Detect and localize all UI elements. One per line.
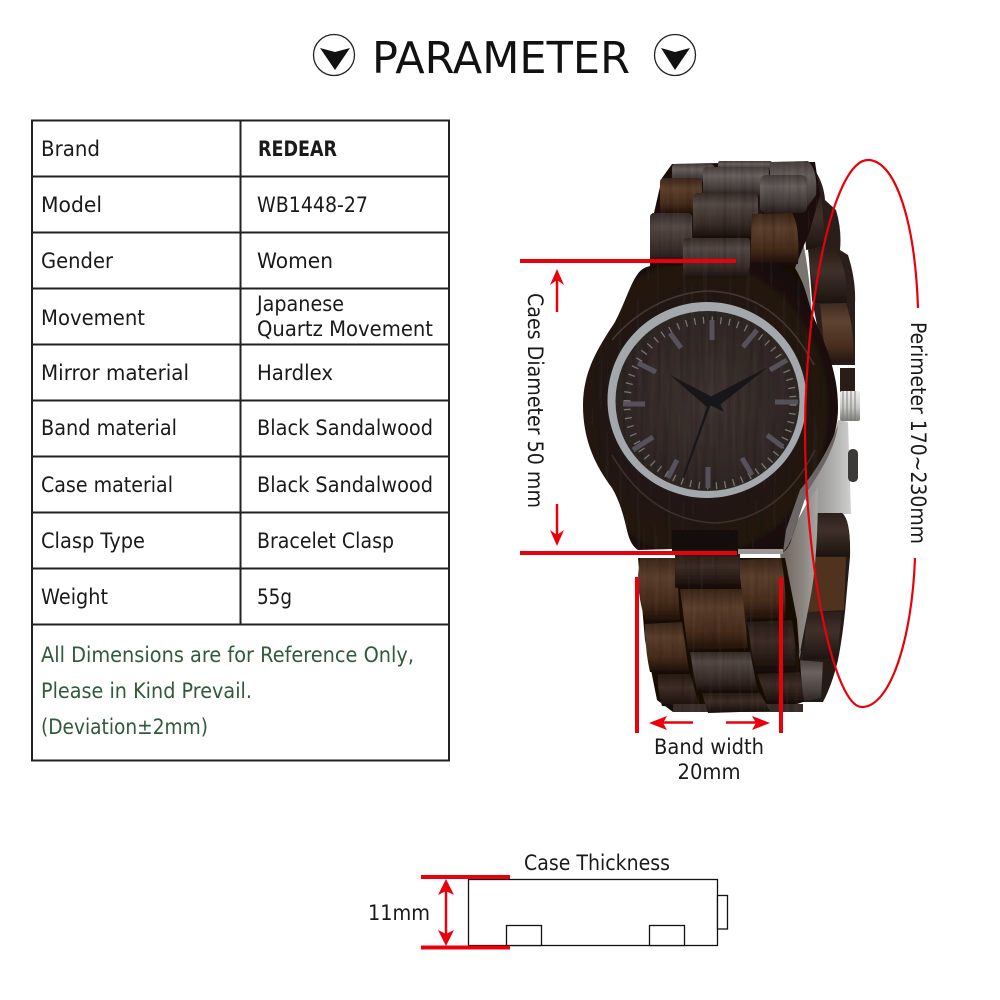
- minute ticks: [627, 320, 793, 486]
- dial: [616, 311, 800, 491]
- crown and pushers: [840, 391, 860, 482]
- watch photo: [583, 161, 860, 713]
- callout: perimeter: Perimeter 170~230mm: [905, 322, 930, 544]
- title: PARAMETER: [372, 33, 630, 84]
- callout: case diameter: [520, 261, 737, 553]
- row: case material: Black Sandalwood: [257, 473, 433, 498]
- arrow: up: [550, 269, 564, 312]
- note: dimensions disclaimer: Please in Kind Prevail.: [41, 679, 252, 704]
- bezel ring: [608, 302, 806, 498]
- callout: perimeter: [805, 160, 930, 707]
- upper band links: [650, 161, 820, 280]
- row: weight: Weight: [41, 585, 108, 610]
- row: model: Model: [41, 193, 102, 218]
- icon: left title arrow: [314, 34, 354, 76]
- row: brand: REDEAR: [258, 137, 337, 162]
- note: dimensions disclaimer: All Dimensions are for Reference Only,: [41, 643, 414, 668]
- row: case material: [41, 473, 433, 498]
- rear band: [797, 172, 855, 702]
- label: case thickness: Case Thickness: [524, 851, 670, 876]
- row: case material: Case material: [41, 473, 173, 498]
- row: movement: [41, 292, 433, 342]
- row: model: WB1448-27: [257, 193, 368, 218]
- row: movement: Japanese: [255, 292, 344, 317]
- row: band material: Band material: [41, 416, 177, 441]
- table grid: [32, 120, 449, 760]
- row: weight: 55g: [257, 585, 292, 610]
- silver clasp: [780, 215, 818, 668]
- row: model: [41, 193, 368, 218]
- note: dimensions disclaimer: [41, 643, 414, 740]
- row: clasp type: Clasp Type: [41, 529, 145, 554]
- row: mirror material: Hardlex: [257, 361, 333, 386]
- panel: specification table: [32, 120, 449, 760]
- row: gender: Women: [257, 249, 333, 274]
- row: band material: Black Sandalwood: [257, 416, 433, 441]
- row: band material: [41, 416, 433, 441]
- hour markers: [623, 320, 798, 488]
- arrow: down: [550, 504, 564, 546]
- case: [583, 265, 838, 552]
- hands: [670, 367, 768, 478]
- row: clasp type: Bracelet Clasp: [257, 529, 394, 554]
- row: movement: Movement: [41, 306, 145, 331]
- row: gender: [41, 249, 333, 274]
- row: gender: Gender: [41, 249, 113, 274]
- arrow: double vertical: [438, 879, 454, 946]
- row: weight: [41, 585, 292, 610]
- label: band width: Band width: [654, 735, 764, 760]
- diagram: case thickness: [368, 851, 728, 948]
- lug block: [672, 530, 738, 553]
- row: brand: [41, 137, 337, 162]
- row: clasp type: [41, 529, 394, 554]
- label: 11mm: 11mm: [368, 901, 430, 926]
- lower band links: [638, 552, 804, 713]
- row: mirror material: [41, 361, 333, 386]
- callout: band width: [637, 577, 781, 785]
- row: brand: Brand: [41, 137, 100, 162]
- row: movement: Quartz Movement: [257, 317, 433, 342]
- arrow: left: [649, 716, 693, 730]
- icon: right title arrow: [654, 34, 696, 76]
- note: dimensions disclaimer: (Deviation±2mm): [41, 715, 208, 740]
- row: mirror material: Mirror material: [41, 361, 189, 386]
- case side outline: [468, 880, 728, 946]
- arrow: right: [726, 716, 770, 730]
- thickness markers: [421, 877, 510, 948]
- callout: band width: 20mm: [678, 760, 740, 785]
- label: case diameter: Caes Diameter 50 mm: [522, 293, 547, 508]
